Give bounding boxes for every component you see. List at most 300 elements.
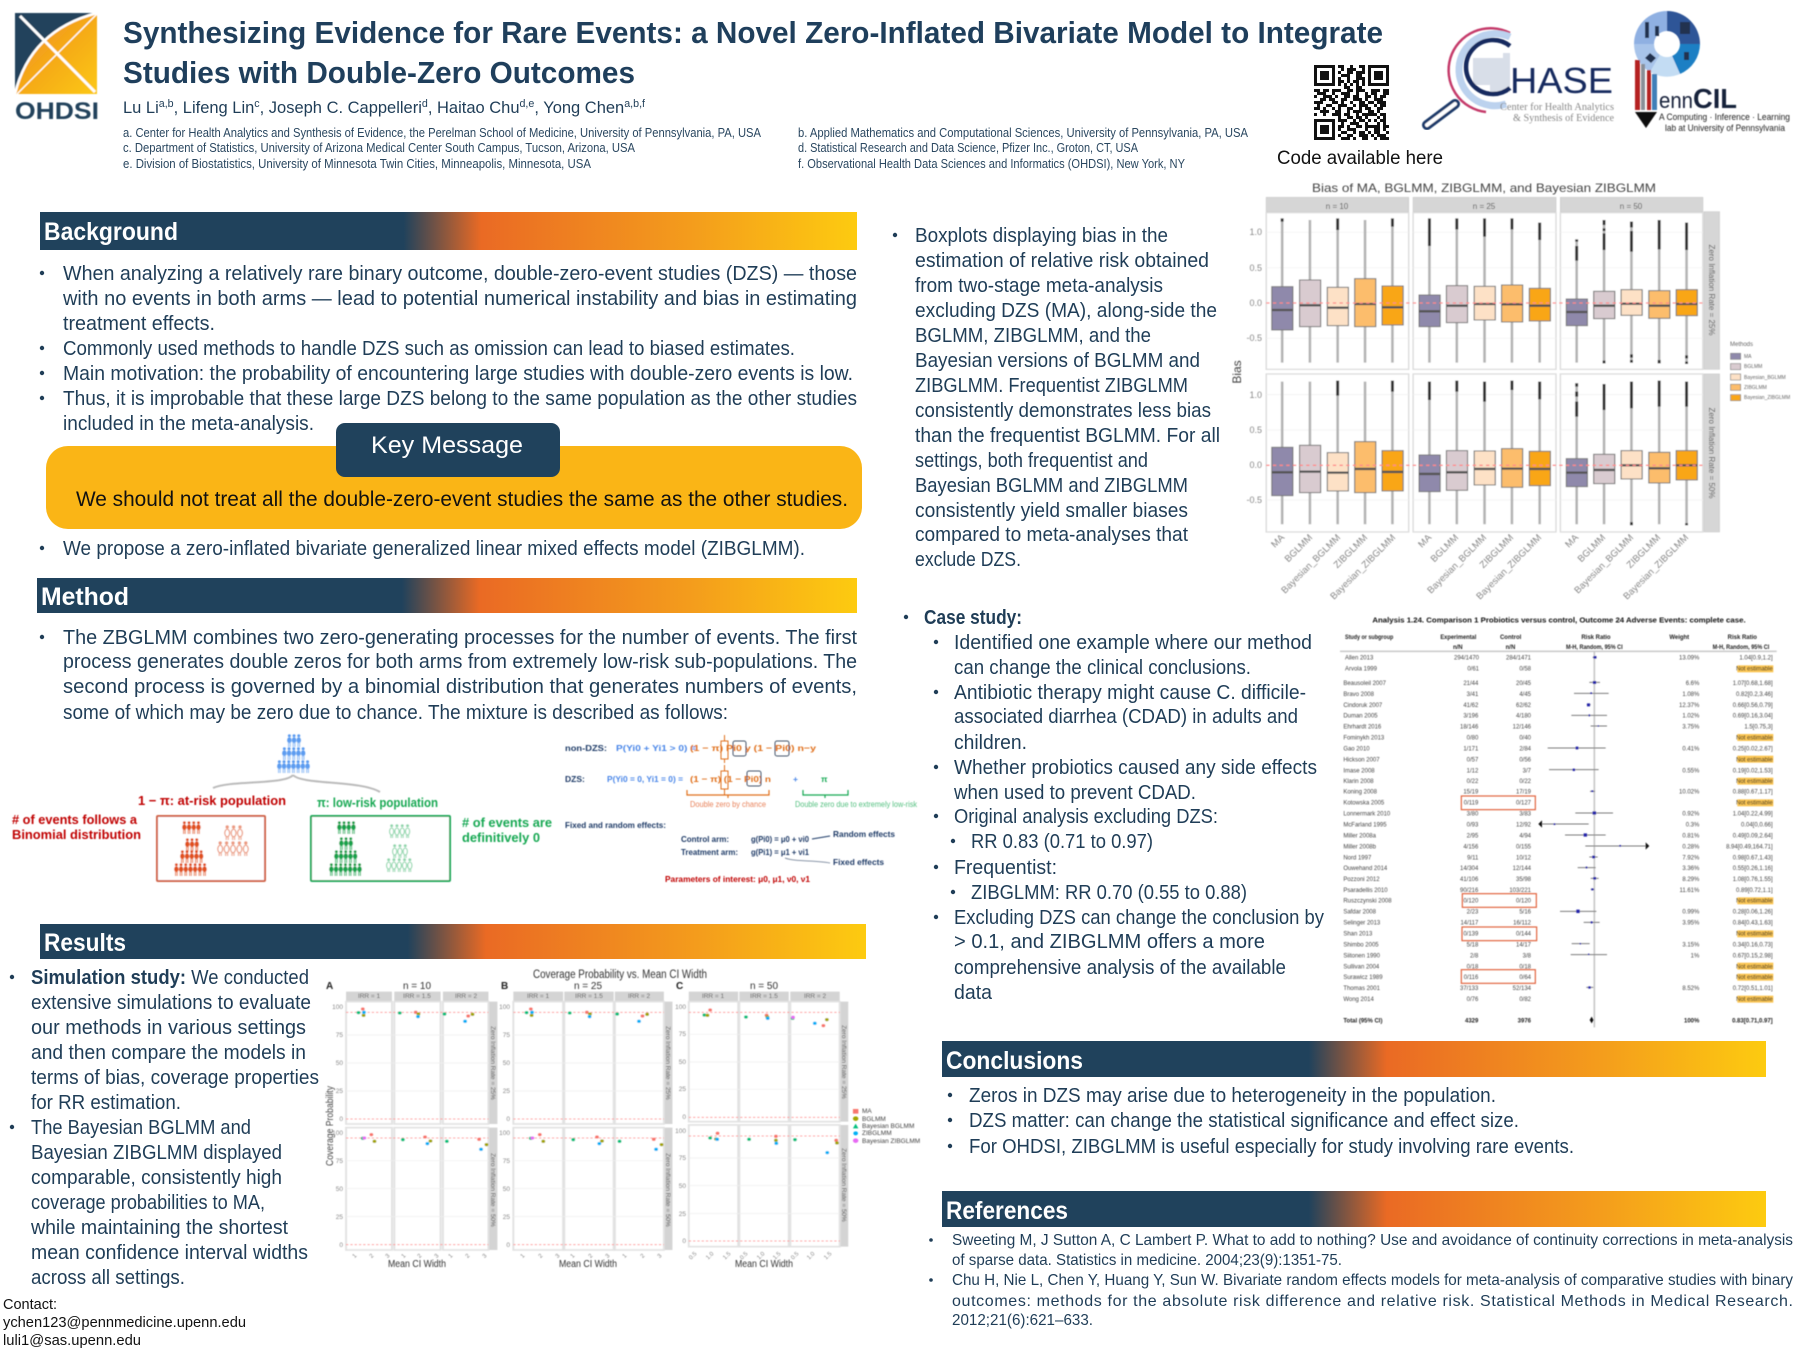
equations: model formulas: (1 − π) (1 − Pi0) n xyxy=(690,774,771,784)
icon: PennCIL logo: CIL xyxy=(1693,83,1737,114)
chart: coverage probability vs mean CI width: B xyxy=(501,981,508,992)
chart: forest plot: 1.08% xyxy=(1682,692,1700,698)
text block: case study: Original analysis excluding DZS: xyxy=(954,806,1218,828)
chart: forest plot: 37/133 xyxy=(1460,986,1479,992)
text block: background: Thus, it is improbable that these large DZS belong to the same population as the other studies xyxy=(63,388,857,410)
chart: coverage probability vs mean CI width: 0 xyxy=(339,1242,343,1249)
chart: forest plot xyxy=(1340,618,1777,1027)
chart: bias boxplots: -0.5 xyxy=(1246,333,1262,343)
chart: forest plot: 0.25[0.02,2.67] xyxy=(1733,746,1773,752)
chart: forest plot: Miller 2008a xyxy=(1343,834,1377,840)
chart: forest plot: 52/134 xyxy=(1513,986,1532,992)
text block: boxplot description: Bayesian BGLMM and ZIBGLMM xyxy=(915,475,1188,497)
chart: forest plot: M-H, Random, 95% CI xyxy=(1566,645,1623,651)
chart: bias boxplots: 1.0 xyxy=(1249,390,1262,400)
icon: CHASE logo: Center for Health Analytics xyxy=(1500,102,1614,113)
chart: coverage probability vs mean CI width: 0.5 xyxy=(739,1251,750,1261)
text block: results: extensive simulations to evaluate xyxy=(31,992,311,1014)
chart: forest plot: 0/127 xyxy=(1516,801,1532,807)
label: low-risk population: π: low-risk population xyxy=(317,795,438,810)
text block: results: terms of bias, coverage properties xyxy=(31,1067,319,1089)
chart: forest plot: Imase 2008 xyxy=(1343,768,1375,774)
chart: bias boxplots xyxy=(1230,181,1790,602)
chart: forest plot: 0.66[0.56,0.79] xyxy=(1733,703,1773,709)
chart: coverage probability vs mean CI width: Bayesian ZIBGLMM xyxy=(862,1138,920,1145)
chart: coverage probability vs mean CI width: 2 xyxy=(538,1253,545,1260)
chart: forest plot: 14/117 xyxy=(1460,921,1479,927)
chart: coverage probability vs mean CI width: Bayesian BGLMM xyxy=(862,1123,914,1130)
equations: model formulas: P(Yi0 + Yi1 > 0) = xyxy=(616,743,696,753)
chart: bias boxplots: -0.5 xyxy=(1246,495,1262,505)
chart: forest plot: Arvola 1999 xyxy=(1345,667,1378,673)
chart: coverage probability vs mean CI width: 25 xyxy=(336,1214,343,1221)
text block: case study: data xyxy=(954,982,993,1004)
chart: forest plot: 3/8 xyxy=(1523,953,1532,959)
chart: forest plot: Safdar 2008 xyxy=(1343,910,1377,916)
text block: boxplot description: BGLMM, ZIBGLMM, and the xyxy=(915,325,1151,347)
label: definitively zero xyxy=(462,815,552,845)
chart: bias boxplots: Bayesian_ZIBGLMM xyxy=(1621,532,1691,602)
chart: forest plot: 0/116 xyxy=(1464,975,1479,981)
chart: forest plot: Pozzoni 2012 xyxy=(1343,877,1380,883)
panel: low-risk box xyxy=(311,816,450,881)
chart: forest plot: M-H, Random, 95% CI xyxy=(1713,645,1770,651)
chart: coverage probability vs mean CI width: Mean CI Width xyxy=(388,1259,446,1270)
chart: bias boxplots: Bayesian_BGLMM xyxy=(1425,532,1489,596)
chart: coverage probability vs mean CI width: 1.0 xyxy=(806,1251,817,1261)
chart: forest plot: 284/1471 xyxy=(1506,655,1532,661)
chart: forest plot: Control xyxy=(1500,635,1522,641)
chart: forest plot: 20/45 xyxy=(1516,681,1532,687)
chart: coverage probability vs mean CI width: 0 xyxy=(339,1116,343,1123)
authors: Lu Li xyxy=(123,98,160,117)
chart: coverage probability vs mean CI width: 2 xyxy=(369,1253,376,1260)
chart: coverage probability vs mean CI width: 50 xyxy=(679,1183,686,1190)
text block: boxplot description: excluding DZS (MA), along-side the xyxy=(915,300,1217,322)
text block: proposal: We propose a zero-inflated bivariate generalized linear mixed effects model (ZIBGLMM). xyxy=(63,538,805,560)
chart: forest plot: 0.28% xyxy=(1682,844,1700,850)
chart: bias boxplots: ZIBGLMM xyxy=(1332,532,1370,571)
equations: model formulas: Control arm: xyxy=(681,834,729,844)
chart: coverage probability vs mean CI width: 1.0 xyxy=(756,1251,767,1261)
equations: model formulas: Double zero due to extremely low-risk xyxy=(795,800,918,809)
text block: boxplot description: from two-stage meta-analysis xyxy=(915,275,1163,297)
text block: boxplot description: Bayesian versions of BGLMM and xyxy=(915,350,1200,372)
text block: results: Simulation study: We conducted xyxy=(31,967,309,989)
chart: forest plot: 0.49[0.09,2.64] xyxy=(1733,834,1773,840)
chart: coverage probability vs mean CI width: 100 xyxy=(332,1130,343,1137)
text block: contact: Contact: xyxy=(3,1297,57,1313)
icon: CHASE logo xyxy=(1427,28,1615,125)
heading: Conclusions xyxy=(942,1041,1766,1077)
chart: forest plot: Not estimable xyxy=(1736,964,1773,970)
text block: method xyxy=(40,627,857,724)
chart: forest plot: 1/12 xyxy=(1467,768,1479,774)
total row: 0.83[0.71,0.97] xyxy=(1732,1019,1773,1025)
equations: model formulas: + xyxy=(793,774,798,784)
chart: coverage probability vs mean CI width: Coverage Probability xyxy=(325,1086,336,1166)
text block: results: and then compare the models in xyxy=(31,1042,306,1064)
chart: coverage probability vs mean CI width: n = 50 xyxy=(750,981,778,992)
label: binomial: # of events follows a xyxy=(12,812,138,827)
text block: boxplot description: estimation of relative risk obtained xyxy=(915,250,1209,272)
chart: forest plot: 3/41 xyxy=(1467,692,1479,698)
chart: forest plot: 8.94[0.49,164.71] xyxy=(1726,844,1773,850)
chart: forest plot: Sullivan 2004 xyxy=(1343,964,1380,970)
chart: forest plot: 1.02% xyxy=(1682,714,1700,720)
chart: forest plot: 14/304 xyxy=(1460,866,1479,872)
chart: coverage probability vs mean CI width: 25 xyxy=(679,1086,686,1093)
chart: forest plot: 0.98[0.67,1.43] xyxy=(1733,855,1773,861)
equations: model formulas: Double zero by chance xyxy=(690,800,767,809)
chart: forest plot: 0.72[0.51,1.01] xyxy=(1733,986,1773,992)
text block: background: Main motivation: the probability of encountering large studies with double-zero events is low. xyxy=(63,363,853,385)
chart: forest plot: 1.07[0.68,1.68] xyxy=(1733,681,1773,687)
chart: forest plot: 1.04[0.22,4.99] xyxy=(1733,812,1773,818)
chart: coverage probability vs mean CI width: 50 xyxy=(503,1186,510,1193)
chart: forest plot: Gao 2010 xyxy=(1343,746,1370,752)
chart: coverage probability vs mean CI width: 100 xyxy=(675,1004,686,1011)
chart: forest plot: Hickson 2007 xyxy=(1343,757,1380,763)
chart: bias boxplots: Methods xyxy=(1730,342,1753,348)
chart: coverage probability vs mean CI width: Zero Inflation Rate = 50% xyxy=(664,1153,671,1227)
chart: forest plot: 3.75% xyxy=(1682,725,1700,731)
text block: background: When analyzing a relatively rare binary outcome, double-zero-event studies (DZS) — those xyxy=(63,263,857,285)
label: at-risk population: 1 − π: at-risk population xyxy=(138,793,286,808)
chart: forest plot: 0/58 xyxy=(1519,667,1532,673)
chart: forest plot: 6.6% xyxy=(1686,681,1700,687)
chart: bias boxplots: Bayesian_BGLMM xyxy=(1572,532,1636,596)
chart: bias boxplots: BGLMM xyxy=(1283,532,1315,565)
chart: forest plot: 0/40 xyxy=(1519,735,1532,741)
chart: forest plot: 7.92% xyxy=(1682,855,1700,861)
chart: bias boxplots: n = 50 xyxy=(1620,202,1643,211)
chart: coverage probability vs mean CI width: IRR = 1 xyxy=(358,993,380,1000)
chart: bias boxplots: 1.0 xyxy=(1249,227,1262,237)
chart: coverage probability vs mean CI width: 1 xyxy=(448,1253,455,1260)
text block: background: Commonly used methods to handle DZS such as omission can lead to biased estimates. xyxy=(63,338,795,360)
chart: forest plot: 0.19[0.02,1.53] xyxy=(1733,768,1773,774)
arrow: population split brace xyxy=(213,775,380,792)
chart: forest plot: Not estimable xyxy=(1736,779,1773,785)
chart: forest plot: Duman 2005 xyxy=(1343,714,1378,720)
chart: coverage probability vs mean CI width: ZIBGLMM xyxy=(862,1130,892,1137)
affiliations xyxy=(123,126,1249,171)
chart: forest plot: 103/221 xyxy=(1509,888,1532,894)
chart: forest plot: 0/93 xyxy=(1467,823,1479,829)
chart: forest plot: 0.28[0.06,1.26] xyxy=(1733,910,1773,916)
chart: forest plot: 41/62 xyxy=(1463,703,1479,709)
chart: forest plot: 0/64 xyxy=(1519,975,1532,981)
equations: model formulas: π xyxy=(821,774,828,784)
chart: forest plot: Ruszczynski 2008 xyxy=(1343,899,1392,905)
affiliations: b. Applied Mathematics and Computational Sciences, University of Pennsylvania, PA, USA xyxy=(798,126,1249,140)
affiliations: e. Division of Biostatistics, University of Minnesota Twin Cities, Minneapolis, Minnesota, USA xyxy=(123,157,592,171)
chart: bias boxplots: Bayesian_BGLMM xyxy=(1744,375,1786,381)
chart: forest plot: Cindoruk 2007 xyxy=(1343,703,1383,709)
chart: coverage probability vs mean CI width: IRR = 1 xyxy=(702,993,724,1000)
equations: model formulas: (1 − π) Pi0 y (1 − Pi0) n−y xyxy=(690,743,816,753)
chart: coverage probability vs mean CI width: 2 xyxy=(417,1253,424,1260)
chart: bias boxplots: n = 10 xyxy=(1326,202,1349,211)
chart: bias boxplots: Bias of MA, BGLMM, ZIBGLMM, and Bayesian ZIBGLMM xyxy=(1312,181,1656,195)
chart: forest plot: 35/98 xyxy=(1516,877,1532,883)
chart: coverage probability vs mean CI width: Zero Inflation Rate = 50% xyxy=(489,1153,496,1227)
chart: forest plot: 18/146 xyxy=(1460,725,1479,731)
chart: forest plot: Klarin 2008 xyxy=(1343,779,1374,785)
total row: 3976 xyxy=(1518,1019,1532,1025)
chart: coverage probability vs mean CI width: IRR = 2 xyxy=(455,993,477,1000)
label: definitively zero: definitively 0 xyxy=(462,830,540,845)
chart: forest plot: 12/144 xyxy=(1513,866,1532,872)
whiskers xyxy=(1282,220,1687,524)
text block: boxplot description: Boxplots displaying bias in the xyxy=(915,225,1168,247)
chart: forest plot: 0.34[0.16,0.73] xyxy=(1733,942,1773,948)
chart: forest plot: Analysis 1.24. Comparison 1 Probiotics versus control, Outcome 24 Adverse Events: complete case. xyxy=(1372,618,1746,625)
chart: coverage probability vs mean CI width: 1.5 xyxy=(823,1251,834,1261)
heading: Background xyxy=(40,212,857,250)
chart: coverage probability vs mean CI width xyxy=(325,969,920,1270)
text block: boxplot description: than the frequentist BGLMM. For all xyxy=(915,425,1220,447)
chart: forest plot: 0.04[0,0.66] xyxy=(1741,823,1773,829)
total row: Total (95% CI) xyxy=(1343,1019,1382,1025)
chart: forest plot: 0/18 xyxy=(1467,964,1479,970)
text block: results: for RR estimation. xyxy=(31,1092,181,1114)
equations: model formulas: g(Pi0) = μ0 + νi0 xyxy=(751,834,809,844)
text block: case study xyxy=(904,607,1324,1004)
chart: coverage probability vs mean CI width: 0 xyxy=(506,1116,510,1123)
chart: coverage probability vs mean CI width: 3 xyxy=(555,1253,562,1260)
text block: method: some of which may be zero due to chance. The mixture is described as follows: xyxy=(63,702,728,724)
chart: coverage probability vs mean CI width: n = 10 xyxy=(403,981,431,992)
equations: model formulas: Fixed and random effects: xyxy=(565,820,666,830)
chart: forest plot: Shimbo 2005 xyxy=(1343,942,1379,948)
chart: forest plot: 0/139 xyxy=(1463,932,1479,938)
chart: bias boxplots: 0.0 xyxy=(1249,460,1262,470)
text block: results: our methods in various settings xyxy=(31,1017,306,1039)
chart: coverage probability vs mean CI width: IRR = 1.5 xyxy=(750,993,778,1000)
chart: coverage probability vs mean CI width: 75 xyxy=(679,1031,686,1038)
chart: coverage probability vs mean CI width: A xyxy=(326,981,333,992)
chart: forest plot: Wong 2014 xyxy=(1343,997,1375,1003)
chart: forest plot: 0/80 xyxy=(1467,735,1479,741)
text block: boxplot description: compared to meta-analyses that xyxy=(915,524,1188,546)
chart: forest plot: 0.84[0.43,1.63] xyxy=(1733,921,1773,927)
chart: coverage probability vs mean CI width: 3 xyxy=(385,1253,392,1260)
chart: coverage probability vs mean CI width: 1 xyxy=(352,1253,359,1260)
text block: contact xyxy=(3,1297,246,1349)
chart: coverage probability vs mean CI width: Coverage Probability vs. Mean CI Width xyxy=(533,969,707,981)
outliers xyxy=(1282,218,1687,525)
total row: 100% xyxy=(1684,1019,1700,1025)
text block: case study: Case study: xyxy=(924,607,1022,629)
chart: bias boxplots: Bayesian_ZIBGLMM xyxy=(1474,532,1544,602)
chart: coverage probability vs mean CI width: 75 xyxy=(679,1155,686,1162)
equations: model formulas: Parameters of interest: μ0, μ1, ν0, ν1 xyxy=(665,874,810,884)
icon: CHASE logo: & Synthesis of Evidence xyxy=(1513,113,1615,124)
chart: coverage probability vs mean CI width: 0 xyxy=(682,1114,686,1121)
text block: case study: Frequentist: xyxy=(954,857,1057,879)
chart: forest plot: Lonnermark 2010 xyxy=(1343,812,1391,818)
text block: results: comparable, consistently high xyxy=(31,1167,282,1189)
equations: model formulas: Random effects xyxy=(833,829,895,839)
chart: forest plot: 0.99% xyxy=(1682,910,1700,916)
chart: forest plot: 2/84 xyxy=(1519,746,1532,752)
chart: bias boxplots: ZIBGLMM xyxy=(1478,532,1516,571)
chart: bias boxplots: BGLMM xyxy=(1744,364,1762,370)
chart: coverage probability vs mean CI width: 1 xyxy=(401,1253,408,1260)
chart: forest plot: n/N xyxy=(1453,645,1463,651)
chart: forest plot: 12/92 xyxy=(1516,823,1532,829)
chart: forest plot: Not estimable xyxy=(1736,899,1773,905)
panel: at-risk box xyxy=(157,816,265,881)
chart: bias boxplots: MA xyxy=(1269,532,1288,550)
chart: forest plot: 3.15% xyxy=(1682,942,1700,948)
text block: conclusions: For OHDSI, ZIBGLMM is useful especially for study involving rare events. xyxy=(969,1136,1574,1158)
callout: key message: Key Message xyxy=(371,432,523,459)
authors: c xyxy=(254,98,260,110)
text block: results: mean confidence interval widths xyxy=(31,1242,308,1264)
chart: forest plot: 0.82[0.2,3.46] xyxy=(1736,692,1773,698)
chart: coverage probability vs mean CI width: 2 xyxy=(640,1253,647,1260)
affiliations: c. Department of Statistics, University of Arizona Medical Center South Campus, Tucson, Arizona, USA xyxy=(123,141,636,155)
authors: , Haitao Chu xyxy=(428,98,520,117)
chart: bias boxplots: BGLMM xyxy=(1576,532,1608,565)
chart: forest plot: 9/11 xyxy=(1467,855,1479,861)
chart: coverage probability vs mean CI width: 0 xyxy=(506,1242,510,1249)
equations: model formulas: DZS: xyxy=(565,774,585,784)
chart: coverage probability vs mean CI width: 50 xyxy=(336,1186,343,1193)
chart: forest plot: Koning 2008 xyxy=(1343,790,1378,796)
chart: bias boxplots: ZIBGLMM xyxy=(1744,385,1767,391)
chart: coverage probability vs mean CI width: 50 xyxy=(503,1060,510,1067)
chart: forest plot: Bravo 2008 xyxy=(1343,692,1375,698)
chart: forest plot: 10.02% xyxy=(1679,790,1700,796)
chart: bias boxplots: MA xyxy=(1744,354,1752,360)
text block: method: second process is governed by a binomial distribution that generates numbers of events, xyxy=(63,676,857,698)
equations: model formulas xyxy=(565,735,918,884)
text block: results: while maintaining the shortest xyxy=(30,1217,288,1239)
chart: coverage probability vs mean CI width: IRR = 2 xyxy=(628,993,650,1000)
chart: forest plot: Risk Ratio xyxy=(1728,635,1757,641)
authors: d,e xyxy=(520,98,534,110)
chart: forest plot: 0/119 xyxy=(1464,801,1479,807)
icon: PennCIL logo: lab at University of Pennsylvania xyxy=(1665,123,1785,133)
chart: forest plot: 21/44 xyxy=(1463,681,1479,687)
text block: background: treatment effects. xyxy=(63,313,215,335)
chart: coverage probability vs mean CI width: MA xyxy=(862,1108,872,1115)
text block: boxplot description: settings, both frequentist and xyxy=(915,450,1148,472)
text block: references: 2012;21(6):621–633. xyxy=(952,1312,1093,1329)
chart: forest plot: 4/45 xyxy=(1519,692,1532,698)
chart: coverage probability vs mean CI width: 100 xyxy=(499,1004,510,1011)
chart: forest plot: 3.36% xyxy=(1682,866,1700,872)
chart: forest plot: 12/146 xyxy=(1513,725,1532,731)
label: binomial: Binomial distribution xyxy=(12,827,141,842)
text block: case study: Excluding DZS can change the conclusion by xyxy=(954,907,1324,929)
text block: results: Bayesian ZIBGLMM displayed xyxy=(31,1142,282,1164)
chart: forest plot: McFarland 1995 xyxy=(1343,823,1387,829)
chart: coverage probability vs mean CI width: 1 xyxy=(520,1253,527,1260)
text block: case study: children. xyxy=(954,732,1027,754)
chart: coverage probability vs mean CI width: IRR = 1 xyxy=(527,993,549,1000)
chart: forest plot: 0/22 xyxy=(1519,779,1532,785)
chart: coverage probability vs mean CI width: Mean CI Width xyxy=(735,1259,793,1270)
chart: coverage probability vs mean CI width: BGLMM xyxy=(862,1116,886,1123)
QR caption: Code available here xyxy=(1277,148,1443,169)
chart: forest plot: Not estimable xyxy=(1736,735,1773,741)
chart: coverage probability vs mean CI width: 3 xyxy=(434,1253,441,1260)
chart: forest plot: 0/120 xyxy=(1463,899,1479,905)
chart: forest plot: Not estimable xyxy=(1736,801,1773,807)
chart: forest plot: Not estimable xyxy=(1736,975,1773,981)
text block: boxplot description: exclude DZS. xyxy=(915,549,1021,571)
text block: case study: comprehensive analysis of the available xyxy=(954,957,1286,979)
chart: forest plot: 1/171 xyxy=(1463,746,1479,752)
icon: QR code xyxy=(1314,65,1389,140)
chart: coverage probability vs mean CI width: 1.5 xyxy=(772,1251,783,1261)
chart: forest plot: 0.89[0.72,1.1] xyxy=(1736,888,1773,894)
chart: bias boxplots: 0.5 xyxy=(1249,425,1262,435)
heading: References: References xyxy=(946,1197,1068,1225)
chart: forest plot: 0.3% xyxy=(1686,823,1700,829)
chart: coverage probability vs mean CI width: 100 xyxy=(332,1004,343,1011)
chart: coverage probability vs mean CI width: 0.5 xyxy=(790,1251,801,1261)
text block: conclusions: DZS matter: can change the statistical significance and effect size. xyxy=(969,1110,1519,1132)
chart: forest plot: 1% xyxy=(1691,953,1700,959)
chart: coverage probability vs mean CI width: 75 xyxy=(336,1158,343,1165)
text block: case study: RR 0.83 (0.71 to 0.97) xyxy=(971,831,1153,853)
text block: results: coverage probabilities to MA, xyxy=(31,1192,265,1214)
heading: Conclusions: Conclusions xyxy=(946,1047,1083,1075)
text block: conclusions: Zeros in DZS may arise due to heterogeneity in the population. xyxy=(969,1085,1496,1107)
chart: forest plot: 0/155 xyxy=(1516,844,1532,850)
chart: coverage probability vs mean CI width: 100 xyxy=(675,1128,686,1135)
chart: bias boxplots: Zero Inflation Rate = 25% xyxy=(1707,245,1716,335)
chart: forest plot: 0/61 xyxy=(1467,667,1480,673)
chart: forest plot: Weight xyxy=(1669,635,1689,641)
chart: coverage probability vs mean CI width: Zero Inflation Rate = 25% xyxy=(489,1026,496,1100)
chart: forest plot: 90/216 xyxy=(1460,888,1479,894)
chart: forest plot: 0/56 xyxy=(1519,757,1532,763)
chart: bias boxplots: ZIBGLMM xyxy=(1625,532,1663,571)
chart: forest plot: 41/106 xyxy=(1460,877,1479,883)
label: binomial xyxy=(12,812,141,842)
text block: case study: Identified one example where our method xyxy=(954,632,1312,654)
chart: coverage probability vs mean CI width: 1.5 xyxy=(722,1251,733,1261)
text block: case study: Whether probiotics caused any side effects xyxy=(954,757,1317,779)
chart: forest plot: 0.88[0.67,1.17] xyxy=(1733,790,1773,796)
chart: forest plot: Not estimable xyxy=(1736,997,1773,1003)
chart: forest plot: Allen 2013 xyxy=(1345,655,1374,661)
authors: a,b,f xyxy=(624,98,646,110)
icon: OHDSI logo xyxy=(15,13,99,125)
chart: coverage probability vs mean CI width: 100 xyxy=(499,1130,510,1137)
chart: forest plot: 16/112 xyxy=(1513,921,1532,927)
chart: forest plot: 3/80 xyxy=(1467,812,1479,818)
chart: coverage probability vs mean CI width: 75 xyxy=(336,1032,343,1039)
chart: forest plot: 0.81% xyxy=(1682,834,1700,840)
callout: key message: We should not treat all the double-zero-event studies the same as the other studies. xyxy=(76,488,848,511)
chart: forest plot: 0.69[0.16,3.04] xyxy=(1733,714,1773,720)
chart: forest plot: Not estimable xyxy=(1736,932,1773,938)
chart: forest plot: Surawicz 1989 xyxy=(1343,975,1383,981)
chart: coverage probability vs mean CI width: 25 xyxy=(503,1088,510,1095)
text block: case study: > 0.1, and ZIBGLMM offers a more xyxy=(954,931,1265,953)
chart: coverage probability vs mean CI width: 25 xyxy=(679,1211,686,1218)
chart: forest plot: 62/62 xyxy=(1516,703,1532,709)
chart: coverage probability vs mean CI width: 50 xyxy=(336,1060,343,1067)
